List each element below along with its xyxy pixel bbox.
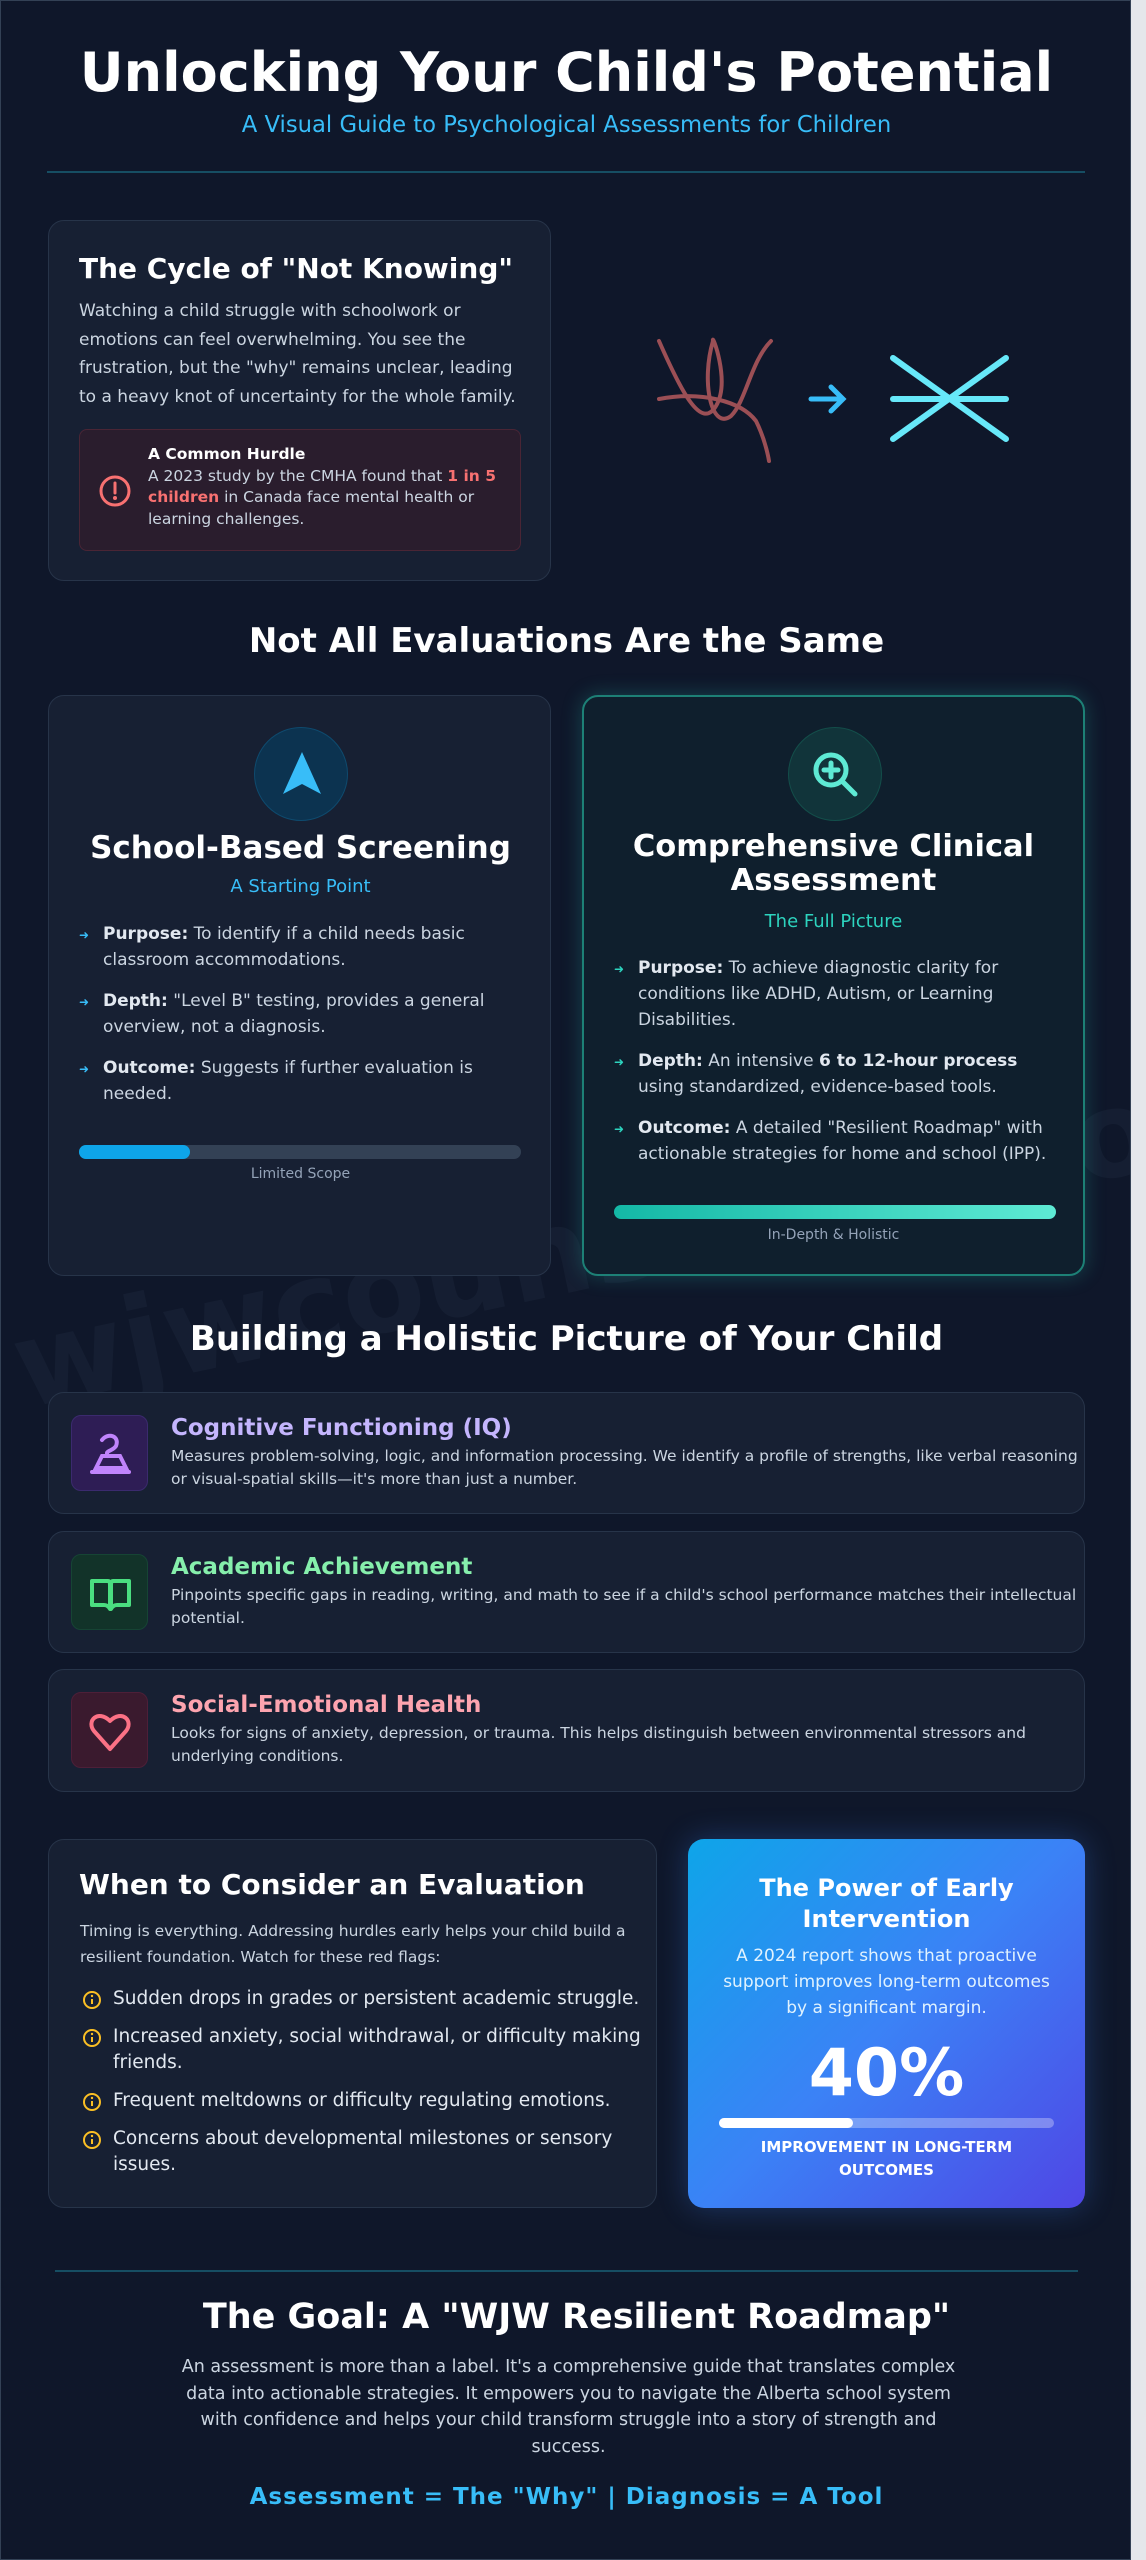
red flag list: Frequent meltdowns or difficulty regulating emotions.	[113, 2090, 610, 2111]
footer tagline: Assessment = The "Why" | Diagnosis = A Tool	[250, 2484, 883, 2510]
panel: school-based screening: A Starting Point	[230, 876, 371, 897]
panel: when to consider	[48, 1839, 657, 2208]
heading: holistic picture: Building a Holistic Picture of Your Child	[190, 1319, 943, 1359]
bullet list	[80, 924, 485, 1104]
panel: comprehensive clinical assessment: The Full Picture	[765, 911, 902, 932]
card title: School-Based Screening	[90, 830, 511, 866]
heading: not all evaluations: Not All Evaluations Are the Same	[249, 621, 884, 661]
red flag list: Sudden drops in grades or persistent academic struggle.	[113, 1988, 639, 2009]
card title: Assessment	[731, 863, 936, 898]
row: cognitive	[48, 1392, 1085, 1514]
stat 40%: 40%	[809, 2036, 964, 2111]
row: academic: Academic Achievement	[171, 1554, 472, 1580]
heading: When to Consider an Evaluation	[79, 1868, 585, 1901]
red flag list: Increased anxiety, social withdrawal, or difficulty making friends.	[113, 2026, 641, 2073]
row: social-emotional: Looks for signs of anxiety, depression, or trauma. This helps distinguish between environmental stressors and underlying conditions.	[171, 1724, 1026, 1765]
heading: The Power of Early Intervention	[759, 1874, 1014, 1933]
icon: alert	[100, 476, 130, 506]
callout: common hurdle: A Common Hurdle	[148, 445, 305, 463]
row: cognitive: Measures problem-solving, logic, and information processing. We identify a profile of strengths, like verbal reasoning or visual-spatial skills—it's more than just a number.	[171, 1447, 1078, 1488]
panel: school-based screening: Limited Scope	[251, 1166, 350, 1182]
bar: limited scope	[79, 1145, 521, 1159]
bullet list	[614, 958, 1046, 1164]
bullet list: Depth: An intensive 6 to 12-hour process using standardized, evidence-based tools.	[638, 1051, 1017, 1097]
icon: navigation arrow	[254, 727, 348, 821]
card title	[633, 829, 1034, 898]
progress bar	[719, 2118, 1054, 2128]
text block: Timing is everything. Addressing hurdles early helps your child build a resilient foundation. Watch for these red flags:	[80, 1922, 626, 1966]
icon: tangled knot to clear lines	[656, 338, 1009, 463]
panel: comprehensive clinical assessment: In-Depth & Holistic	[768, 1227, 899, 1243]
panel: power of early intervention: IMPROVEMENT IN LONG-TERM OUTCOMES	[761, 2138, 1012, 2179]
heading: The Cycle of "Not Knowing"	[79, 252, 513, 285]
bullet list: Depth: "Level B" testing, provides a general overview, not a diagnosis.	[103, 991, 485, 1037]
text: A 2024 report shows that proactive support improves long-term outcomes by a significant margin.	[723, 1946, 1050, 2018]
subtitle: A Visual Guide to Psychological Assessments for Children	[242, 112, 891, 138]
row: social-emotional: Social-Emotional Health	[171, 1692, 481, 1718]
red flag list	[83, 1988, 641, 2175]
row: academic: Pinpoints specific gaps in reading, writing, and math to see if a child's school performance matches their intellectual potential.	[171, 1586, 1076, 1627]
bullet list: Purpose: To identify if a child needs basic classroom accommodations.	[103, 924, 465, 970]
row: social-emotional	[48, 1669, 1085, 1792]
bullet list: Outcome: Suggests if further evaluation is needed.	[103, 1058, 473, 1104]
panel: comprehensive clinical assessment	[582, 695, 1085, 1276]
text block: Watching a child struggle with schoolwork or emotions can feel overwhelming. You see the frustration, but the "why" remains unclear, leading to a heavy knot of uncertainty for the whole family.	[79, 301, 516, 406]
row: cognitive: Cognitive Functioning (IQ)	[171, 1415, 512, 1441]
red flag list: Concerns about developmental milestones or sensory issues.	[113, 2128, 612, 2175]
icon: heart	[71, 1692, 148, 1768]
row: academic	[48, 1531, 1085, 1653]
title: Unlocking Your Child's Potential	[80, 41, 1053, 104]
icon: book	[71, 1554, 148, 1630]
panel: power of early intervention	[688, 1839, 1085, 2208]
panel: cycle of not knowing	[48, 220, 551, 581]
bar: in-depth	[614, 1205, 1056, 1219]
card title: Comprehensive Clinical	[633, 829, 1034, 864]
heading: the goal: The Goal: A "WJW Resilient Roadmap"	[203, 2297, 950, 2337]
icon: magnifier	[788, 727, 882, 821]
bullet list: Purpose: To achieve diagnostic clarity for conditions like ADHD, Autism, or Learning Disabilities.	[638, 958, 998, 1030]
panel: school-based screening	[48, 695, 551, 1276]
arrow	[811, 387, 843, 411]
icon: brain	[71, 1415, 148, 1491]
bullet list: Outcome: A detailed "Resilient Roadmap" with actionable strategies for home and school (IPP).	[638, 1118, 1046, 1164]
text block: goal: An assessment is more than a label. It's a comprehensive guide that translates complex data into actionable strategies. It empowers you to navigate the Alberta school system with confidence and helps your child transform struggle into a story of strength and success.	[182, 2357, 955, 2456]
callout: common hurdle	[79, 429, 521, 551]
callout: common hurdle: A 2023 study by the CMHA found that 1 in 5 children in Canada face mental health or learning challenges.	[148, 466, 496, 528]
